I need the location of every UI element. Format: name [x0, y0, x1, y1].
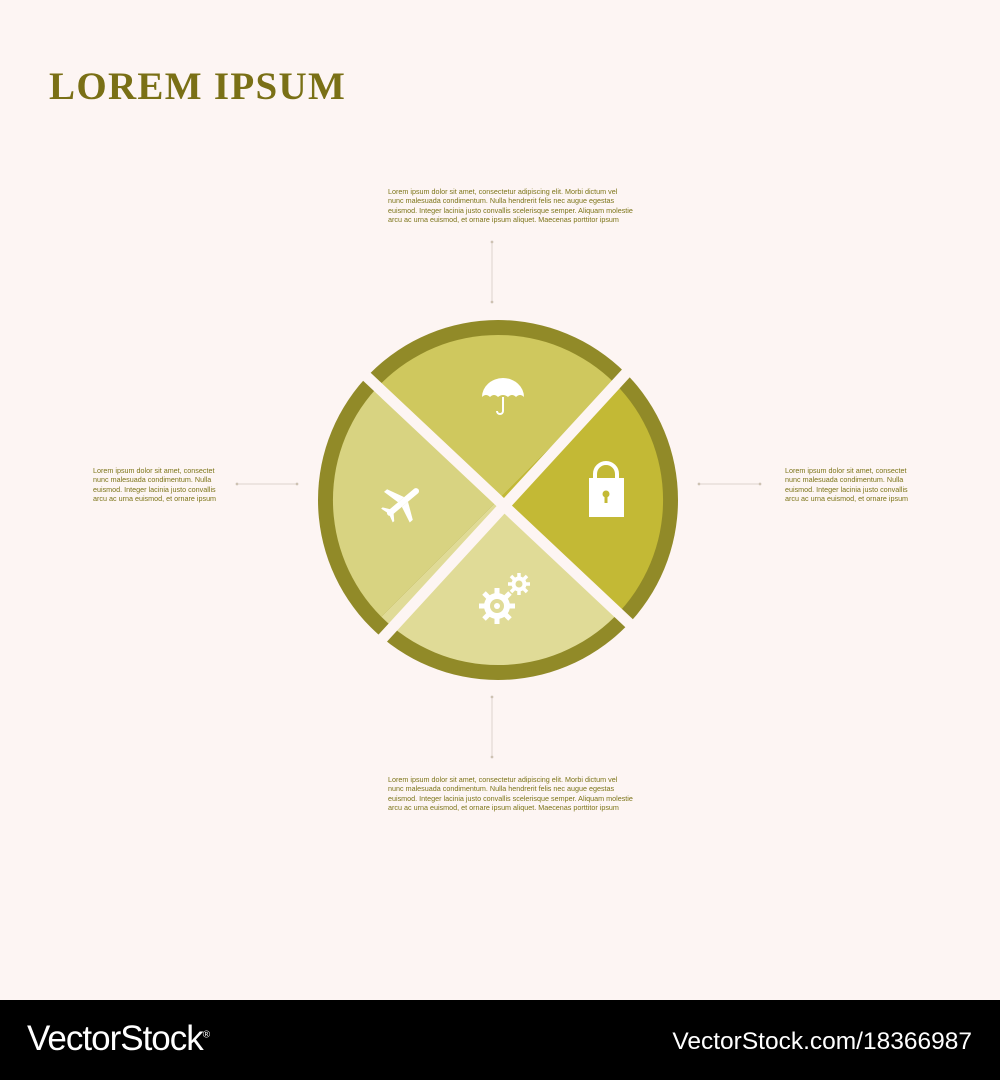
title: LOREM IPSUM — [49, 65, 346, 108]
text block: top: Lorem ipsum dolor sit amet, consectetur adipiscing elit. Morbi dictum vel — [388, 187, 617, 196]
icon: gears — [479, 573, 530, 624]
text block: left — [93, 466, 216, 503]
text block: top: nunc malesuada condimentum. Nulla hendrerit felis nec augue egestas — [388, 196, 614, 205]
footer bar: VectorStock.com/18366987 — [672, 1028, 972, 1055]
footer bar — [0, 1000, 1000, 1080]
text block: bottom — [388, 775, 633, 812]
icon: umbrella — [482, 378, 524, 414]
icon: plane — [374, 474, 431, 531]
text block: bottom: nunc malesuada condimentum. Nulla hendrerit felis nec augue egestas — [388, 784, 614, 793]
text block: top: euismod. Integer lacinia justo convallis scelerisque semper. Aliquam molestie — [388, 206, 633, 215]
text block: left: euismod. Integer lacinia justo convallis — [93, 485, 216, 494]
text block: right: euismod. Integer lacinia justo convallis — [785, 485, 908, 494]
pie chart — [318, 320, 678, 680]
text block: left: nunc malesuada condimentum. Nulla — [93, 475, 211, 484]
text block: left: Lorem ipsum dolor sit amet, consectet — [93, 466, 214, 475]
icon: lock — [589, 463, 624, 517]
text block: right: arcu ac urna euismod, et ornare ipsum — [785, 494, 908, 503]
text block: right: Lorem ipsum dolor sit amet, consectet — [785, 466, 906, 475]
text block: top: arcu ac urna euismod, et ornare ipsum aliquet. Maecenas porttitor ipsum — [388, 215, 619, 224]
text block: bottom: Lorem ipsum dolor sit amet, consectetur adipiscing elit. Morbi dictum vel — [388, 775, 617, 784]
text block: right: nunc malesuada condimentum. Nulla — [785, 475, 903, 484]
text block: bottom: arcu ac urna euismod, et ornare ipsum aliquet. Maecenas porttitor ipsum — [388, 803, 619, 812]
text block: top — [388, 187, 633, 224]
connectors — [236, 241, 761, 758]
text block: bottom: euismod. Integer lacinia justo convallis scelerisque semper. Aliquam molestie — [388, 794, 633, 803]
text block: left: arcu ac urna euismod, et ornare ipsum — [93, 494, 216, 503]
text block: right — [785, 466, 908, 503]
footer bar: VectorStock® — [27, 1019, 209, 1058]
